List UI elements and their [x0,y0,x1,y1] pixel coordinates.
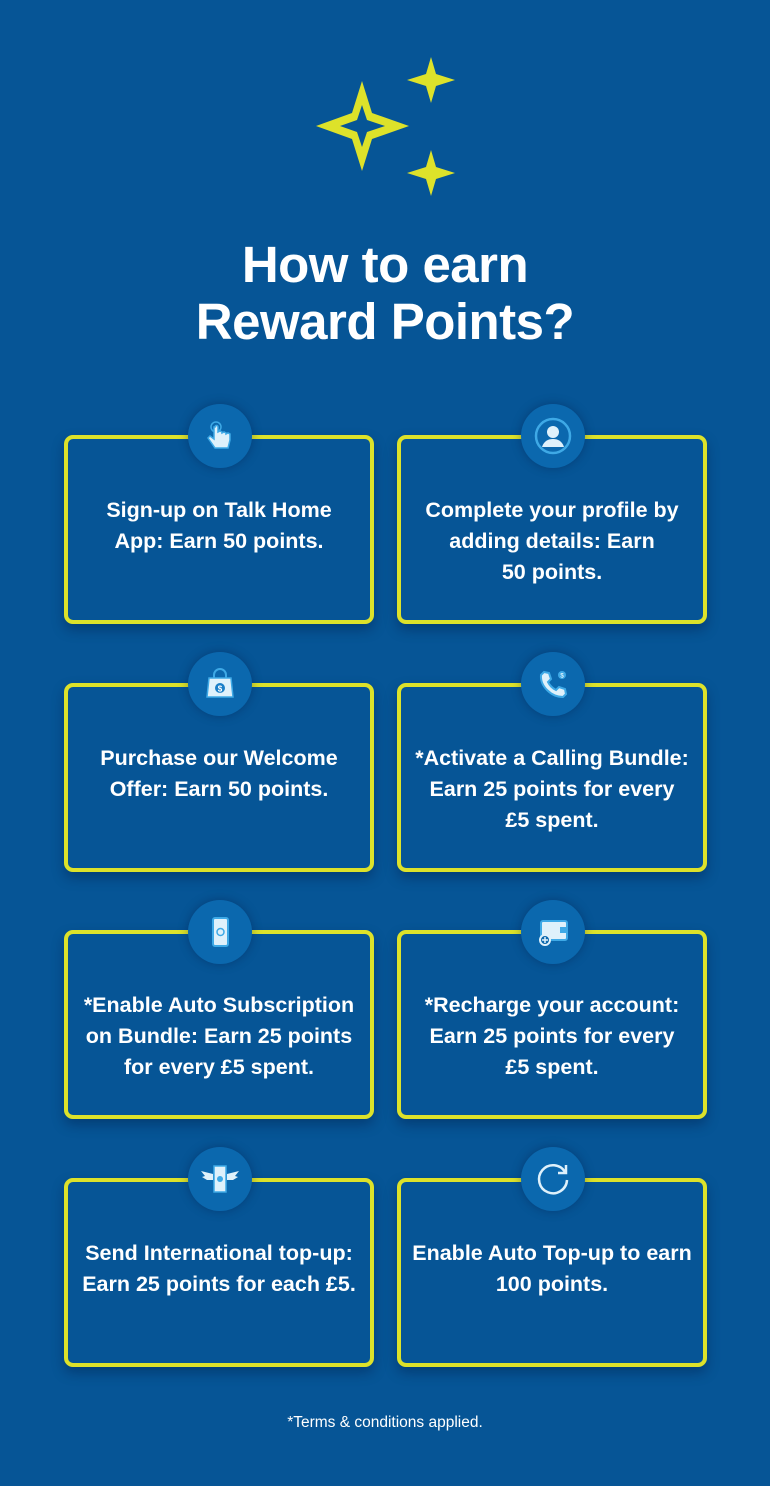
card: recharge: £5 spent. [505,1055,599,1079]
card: auto subscription: on Bundle: Earn 25 points [86,1024,352,1048]
icon: wallet [521,900,585,964]
icon: refresh [521,1147,585,1211]
icon: user [521,404,585,468]
icon: hand tap [188,404,252,468]
card: profile: adding details: Earn [449,529,655,553]
icon: phone [521,652,585,716]
card: international top-up [64,1178,374,1367]
card: profile: Complete your profile by [425,498,679,522]
footnote: *Terms & conditions applied. [287,1414,483,1431]
card: international top-up: Earn 25 points for each £5. [82,1272,356,1296]
card: welcome offer [64,683,374,872]
card: sign-up: Sign-up on Talk Home [106,498,332,522]
title: How to earn [242,236,528,293]
card: auto subscription: for every £5 spent. [124,1055,314,1079]
icon: mobile [188,900,252,964]
icon: winged money [188,1147,252,1211]
icon: sparkles [316,57,455,196]
card: calling bundle: *Activate a Calling Bundle: [415,746,689,770]
card: auto top-up: 100 points. [496,1272,608,1296]
card: calling bundle: £5 spent. [505,808,599,832]
card: recharge: *Recharge your account: [425,993,679,1017]
card: international top-up: Send International top-up: [85,1241,353,1265]
title [196,236,574,350]
card: auto top-up [397,1178,707,1367]
icon: phone: $ [560,674,564,680]
title: Reward Points? [196,293,574,350]
card: sign-up [64,435,374,624]
card: welcome offer: Purchase our Welcome [100,746,338,770]
card: recharge: Earn 25 points for every [430,1024,674,1048]
card: calling bundle: Earn 25 points for every [430,777,674,801]
card: auto top-up: Enable Auto Top-up to earn [412,1241,692,1265]
card: recharge [397,930,707,1119]
icon: shopping bag: $ [218,684,223,694]
card: sign-up: App: Earn 50 points. [114,529,324,553]
icon: shopping bag [188,652,252,716]
card: profile [397,435,707,624]
card: auto subscription: *Enable Auto Subscription [84,993,354,1017]
card: welcome offer: Offer: Earn 50 points. [110,777,328,801]
card: calling bundle [397,683,707,872]
card: profile: 50 points. [502,560,602,584]
card: auto subscription [64,930,374,1119]
